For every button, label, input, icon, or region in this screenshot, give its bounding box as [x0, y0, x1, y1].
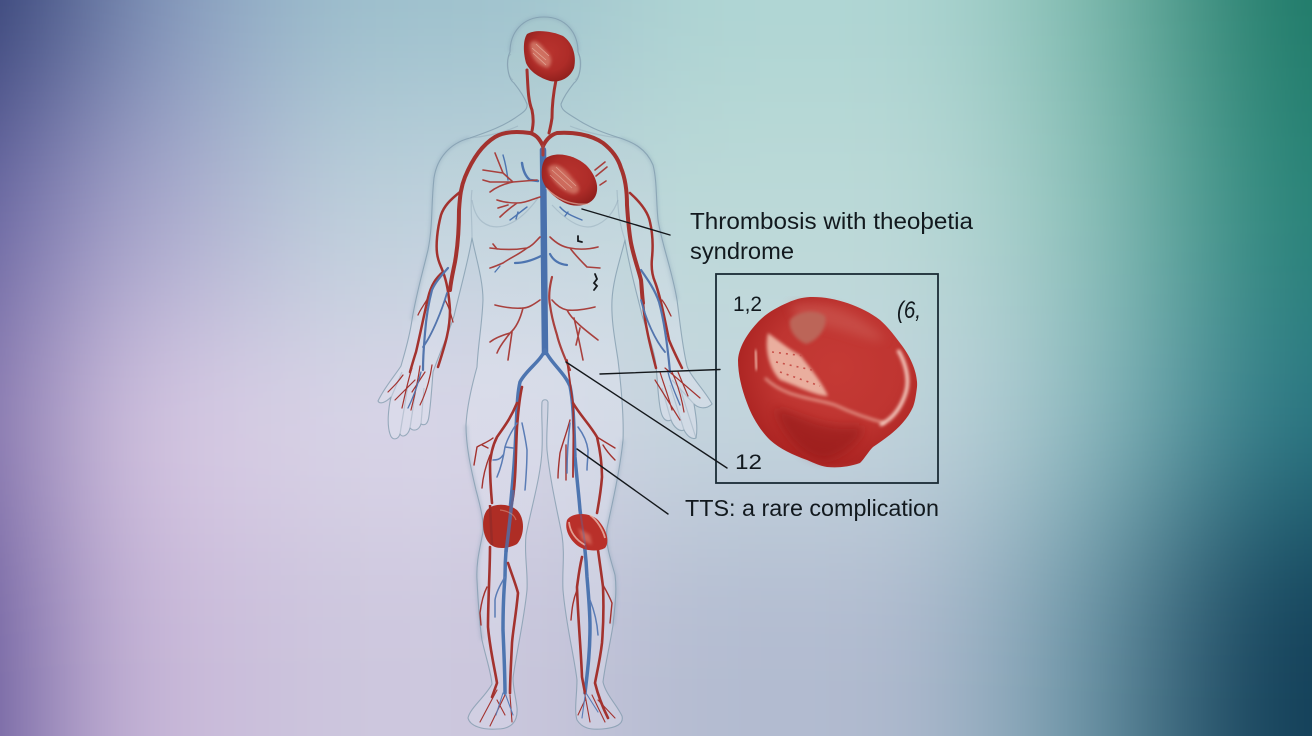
heading: thrombosis syndrome: syndrome — [690, 238, 794, 264]
clot at left knee — [483, 490, 523, 552]
hand vessels right — [655, 368, 700, 420]
body edge haze — [412, 17, 677, 640]
clot in chest — [542, 154, 597, 206]
hand vessels left — [388, 365, 432, 410]
body silhouette — [378, 17, 712, 729]
callout box — [716, 274, 938, 483]
leg arteries — [474, 360, 615, 726]
heading: thrombosis syndrome: Thrombosis with theoþetia — [690, 208, 973, 234]
caption: TTS complication: TTS: a rare complication — [685, 495, 939, 521]
heading: thrombosis syndrome — [690, 208, 973, 264]
leg veins — [493, 423, 598, 718]
box number bottom left: 12 — [735, 451, 762, 474]
box number top left: 1,2 — [733, 293, 762, 316]
small stray marks — [578, 236, 597, 290]
leader lines — [566, 209, 727, 514]
large red blood cell — [738, 297, 917, 467]
arm veins — [408, 268, 680, 408]
human body figure — [378, 17, 712, 729]
chest and shoulder contours — [390, 54, 696, 438]
clot in head — [524, 31, 575, 81]
box mark top right: (6, — [897, 297, 921, 324]
central vein — [495, 150, 590, 693]
clot at right knee — [566, 510, 607, 550]
arteries: head, neck, arch, arms — [388, 70, 700, 420]
torso arteries — [483, 146, 607, 370]
